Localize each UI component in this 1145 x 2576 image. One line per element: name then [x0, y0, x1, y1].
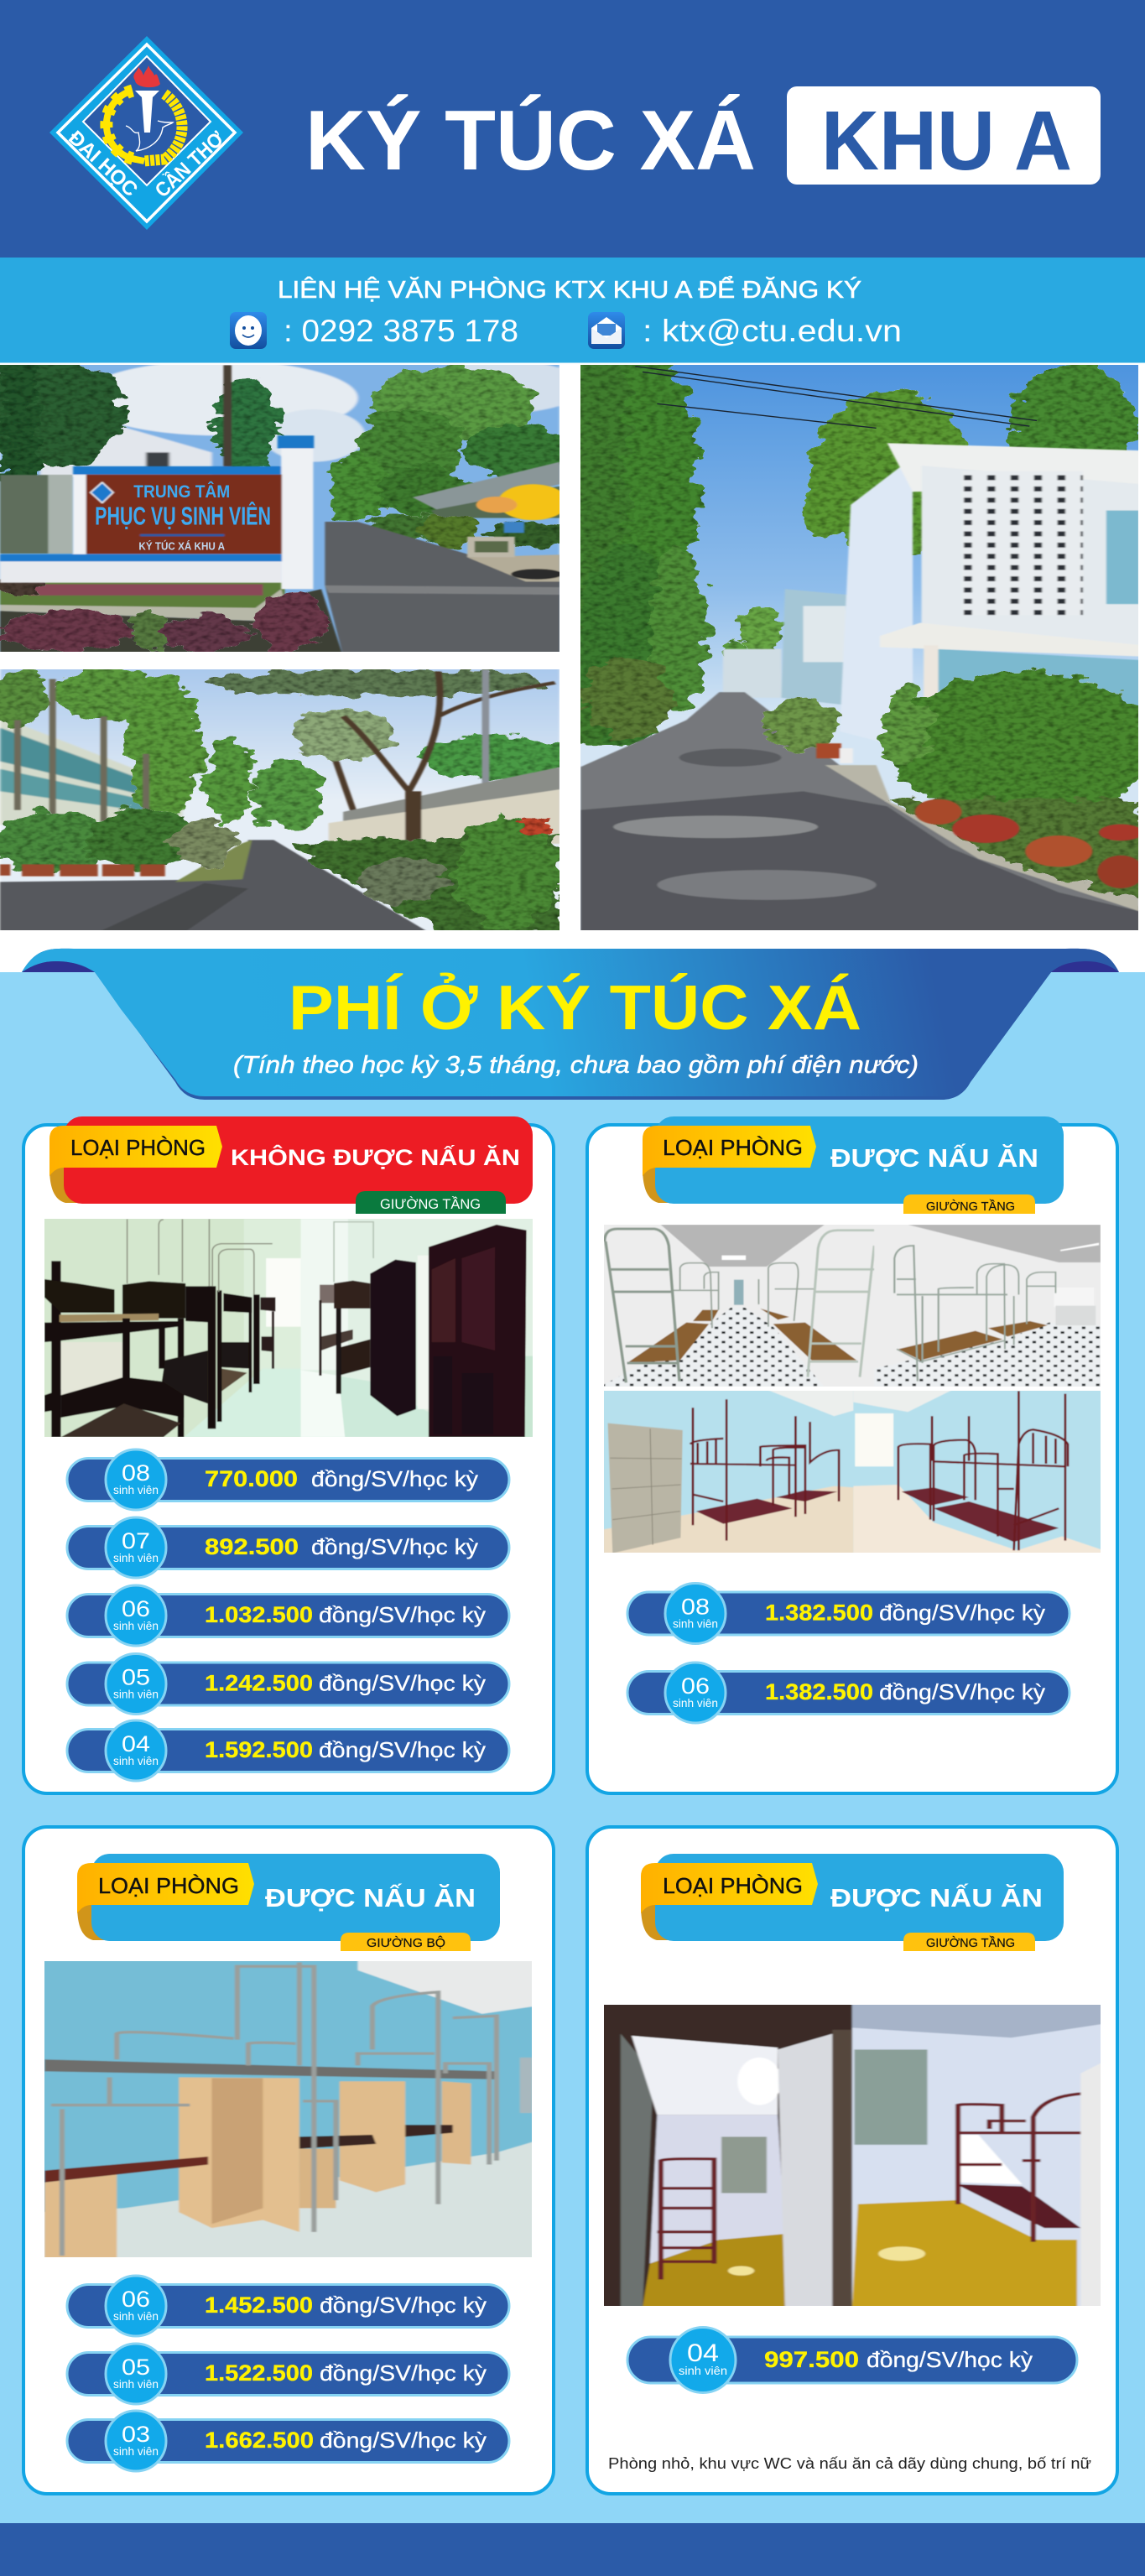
price row: 08 students: 770.000 — [205, 1466, 298, 1491]
photo: sign and entrance road — [0, 357, 584, 657]
icon: email envelope — [588, 312, 625, 349]
photo: sign and entrance road: TRUNG TÂM — [133, 481, 230, 502]
bed tag: green: GIƯỜNG TẦNG — [380, 1196, 481, 1212]
fee heading text: PHÍ Ở KÝ TÚC XÁ — [289, 972, 861, 1043]
room type banner: blue: LOẠI PHÒNG — [663, 1135, 803, 1160]
price row: 03 students: sinh viên — [113, 2445, 159, 2458]
bed tag: yellow: GIƯỜNG TẦNG — [926, 1200, 1015, 1214]
photo: sign and entrance road: KÝ TÚC XÁ KHU A — [138, 539, 225, 553]
logo: Đại học Cần Thơ — [49, 36, 243, 230]
bed tag: yellow — [341, 1933, 471, 1951]
price row: 05 students: 05 — [122, 2355, 150, 2380]
price row: 05 students: 1.522.500 — [205, 2360, 313, 2386]
price row: 04 students: 1.592.500 — [205, 1737, 313, 1762]
photo: dark wooden bunks and wardrobes — [42, 1216, 534, 1440]
panel: cooking allowed, small room — [587, 1827, 1117, 2494]
fee subheading: (Tính theo học kỳ 3,5 tháng, chưa bao gồm phí điện nước) — [233, 1052, 919, 1079]
price row: 04 students: đồng/SV/học kỳ — [867, 2347, 1033, 2372]
price row: 05 students — [67, 2344, 509, 2404]
bed tag: yellow: GIƯỜNG BỘ — [367, 1936, 445, 1950]
room type banner: blue: LOẠI PHÒNG — [98, 1873, 239, 1898]
bed tag: green — [356, 1191, 506, 1214]
title badge: KHU A: KHU A — [821, 94, 1072, 188]
contact heading: LIÊN HỆ VĂN PHÒNG KTX KHU A ĐỂ ĐĂNG KÝ — [278, 275, 861, 304]
price row: 05 students: sinh viên — [113, 2378, 159, 2391]
panel: room without cooking, bunk bed — [23, 1116, 554, 1793]
email address: : ktx@ctu.edu.vn — [643, 314, 902, 348]
price row: 08 students: đồng/SV/học kỳ — [311, 1466, 478, 1491]
price row: 08 students: 1.382.500 — [765, 1600, 873, 1626]
price row: 06 students: 1.032.500 — [205, 1602, 313, 1627]
photo: red bunks and lockers on blue walls — [600, 1388, 1104, 1556]
header band — [0, 0, 1145, 258]
logo: Đại học Cần Thơ: CẦN THƠ — [150, 127, 229, 202]
price row: 04 students: sinh viên — [113, 1755, 159, 1767]
photo: metal bunks on dotted floor — [600, 1220, 1104, 1391]
price row: 06 students: 1.382.500 — [765, 1679, 873, 1704]
room type banner: red — [49, 1116, 533, 1204]
price row: 03 students: 1.662.500 — [205, 2428, 314, 2453]
price row: 04 students: 04 — [687, 2339, 719, 2367]
price row: 04 students: 997.500 — [764, 2347, 859, 2372]
price row: 04 students — [67, 1720, 509, 1781]
price row: 08 students: đồng/SV/học kỳ — [879, 1600, 1045, 1626]
panel: cooking allowed, fixed furniture bed — [23, 1827, 554, 2494]
price row: 06 students — [67, 1585, 509, 1646]
price row: 06 students: sinh viên — [673, 1697, 718, 1710]
contact band — [0, 258, 1145, 362]
phone number: : 0292 3875 178 — [284, 314, 518, 348]
price row: 08 students: 08 — [681, 1594, 710, 1619]
price row: 06 students: đồng/SV/học kỳ — [319, 1602, 486, 1627]
room type banner: blue — [643, 1116, 1064, 1204]
price row: 07 students: sinh viên — [113, 1552, 159, 1564]
fee section background — [0, 972, 1145, 2523]
price row: 04 students: 04 — [122, 1731, 150, 1756]
price row: 08 students: sinh viên — [673, 1617, 718, 1631]
price row: 08 students — [627, 1584, 1070, 1644]
price row: 06 students: 06 — [122, 1596, 150, 1621]
title: KÝ TÚC XÁ: KÝ TÚC XÁ — [305, 94, 756, 188]
room type banner: red: KHÔNG ĐƯỢC NẤU ĂN — [231, 1144, 520, 1170]
footer band — [0, 2523, 1145, 2576]
price row: 04 students: đồng/SV/học kỳ — [319, 1737, 486, 1762]
room type banner: blue: ĐƯỢC NẤU ĂN — [830, 1883, 1043, 1912]
room type banner: blue: LOẠI PHÒNG — [663, 1873, 803, 1898]
price row: 08 students: 08 — [122, 1460, 150, 1486]
room type banner: red: LOẠI PHÒNG — [70, 1135, 206, 1160]
room type banner: blue — [77, 1854, 500, 1941]
price row: 04 students — [627, 2327, 1077, 2392]
photo: dormitory road with trees — [0, 668, 573, 934]
price row: 05 students: đồng/SV/học kỳ — [319, 1671, 486, 1696]
price row: 05 students: 1.242.500 — [205, 1671, 313, 1696]
price row: 06 students — [67, 2276, 509, 2336]
price row: 06 students: 06 — [681, 1673, 710, 1699]
room type banner: blue — [641, 1854, 1064, 1941]
price row: 04 students: sinh viên — [679, 2365, 727, 2377]
room type banner: blue: ĐƯỢC NẤU ĂN — [830, 1143, 1038, 1173]
icon: phone support face — [230, 312, 267, 349]
photo: loft beds with cabinets — [40, 1959, 537, 2260]
note text: Phòng nhỏ, khu vực WC và nấu ăn cả dãy dùng chung, bố trí nữ — [608, 2455, 1091, 2472]
price row: 07 students: đồng/SV/học kỳ — [311, 1534, 478, 1559]
bed tag: yellow: GIƯỜNG TẦNG — [926, 1936, 1015, 1950]
bed tag: yellow — [903, 1933, 1035, 1951]
price row: 08 students — [67, 1449, 509, 1510]
price row: 05 students: đồng/SV/học kỳ — [320, 2360, 487, 2386]
photo: dormitory building and path — [562, 346, 1145, 934]
ribbon: fee heading — [22, 949, 1119, 1100]
price row: 08 students: sinh viên — [113, 1484, 159, 1496]
price row: 06 students: sinh viên — [113, 1620, 159, 1632]
price row: 06 students: 1.452.500 — [205, 2292, 313, 2318]
price row: 06 students — [627, 1663, 1070, 1723]
price row: 07 students: 07 — [122, 1528, 150, 1553]
price row: 06 students: 06 — [122, 2287, 150, 2312]
price row: 05 students — [67, 1654, 509, 1715]
panel: cooking allowed, bunk bed, two photos — [587, 1116, 1117, 1793]
logo: Đại học Cần Thơ: ĐẠI HỌC — [64, 127, 142, 201]
price row: 06 students: đồng/SV/học kỳ — [879, 1679, 1045, 1704]
price row: 06 students: sinh viên — [113, 2310, 159, 2323]
price row: 03 students — [67, 2411, 509, 2471]
price row: 07 students: 892.500 — [205, 1534, 299, 1559]
photo: small room with yellow floor — [599, 2002, 1104, 2308]
price row: 06 students: đồng/SV/học kỳ — [320, 2292, 487, 2318]
room type banner: blue: ĐƯỢC NẤU ĂN — [265, 1883, 476, 1912]
price row: 03 students: đồng/SV/học kỳ — [320, 2428, 487, 2453]
price row: 05 students: sinh viên — [113, 1688, 159, 1701]
price row: 05 students: 05 — [122, 1664, 150, 1689]
photo: sign and entrance road: PHỤC VỤ SINH VIÊN — [95, 502, 271, 530]
bed tag: yellow — [903, 1194, 1035, 1214]
price row: 07 students — [67, 1517, 509, 1578]
price row: 03 students: 03 — [122, 2422, 150, 2447]
